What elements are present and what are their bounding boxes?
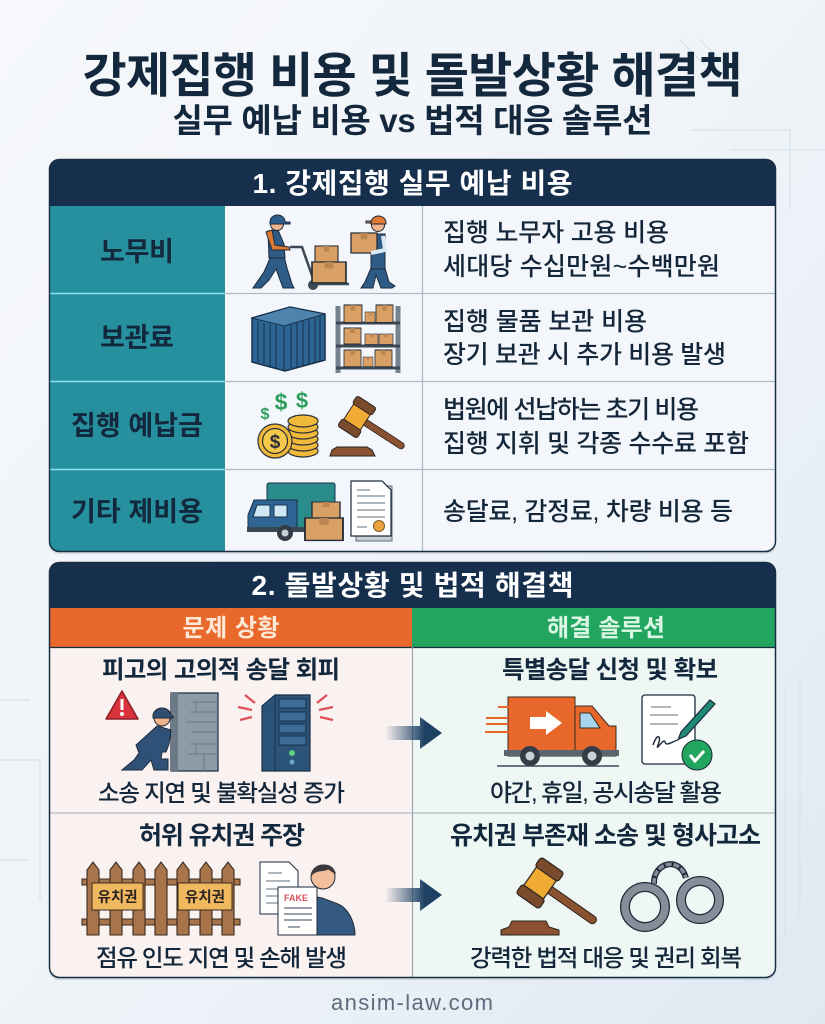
icon: person hiding behind wall: [122, 693, 218, 771]
row: deposit: 집행 예납금: [71, 411, 203, 441]
description: deposit: 법원에 선납하는 초기 비용: [443, 396, 699, 424]
title: 강제집행 비용 및 돌발상황 해결책: [82, 50, 742, 103]
icon: person with fake document: [260, 862, 355, 935]
description: labour: [443, 219, 720, 281]
icon: coins and gavel: [258, 388, 414, 462]
panel heading: 2. 돌발상황 및 법적 해결책: [252, 570, 574, 601]
panel: incidents and solutions: [49, 562, 776, 980]
icon: warning sign: [106, 691, 138, 719]
problem 2: false lien: 점유 인도 지연 및 손해 발생: [96, 945, 347, 971]
row: labour: 노무비: [100, 237, 174, 267]
solution 1: special service: 야간, 휴일, 공시송달 활용: [490, 780, 722, 807]
panel: enforcement costs: [49, 159, 776, 554]
icon: coins and gavel: $: [296, 388, 308, 413]
solution 1: special service: 특별송달 신청 및 확보: [502, 656, 718, 684]
description: storage: 집행 물품 보관 비용: [443, 308, 647, 336]
description: deposit: 집행 지휘 및 각종 수수료 포함: [443, 430, 749, 458]
icon: workers moving boxes: [253, 215, 395, 290]
icon: server with alert rays: [238, 695, 333, 771]
icon: fast orange truck: [485, 697, 619, 766]
arrow: problem 2 to solution 2: [385, 879, 442, 911]
row: storage: 보관료: [100, 323, 174, 353]
row: storage: [100, 305, 726, 373]
subtitle: 실무 예납 비용 vs 법적 대응 솔루션: [172, 102, 652, 139]
solution 2: lawsuit and complaint: [450, 822, 761, 971]
footer website: ansim-law.com: [331, 990, 493, 1015]
row: labour: [100, 215, 720, 290]
description: other costs: 송달료, 감정료, 차량 비용 등: [443, 498, 733, 526]
description: deposit: [443, 396, 749, 458]
icon: gavel: [501, 857, 608, 940]
panel heading: 1. 강제집행 실무 예납 비용: [252, 168, 572, 199]
column header: problem: 문제 상황: [182, 615, 280, 642]
icon: fence with lien signs: 유치권: [97, 889, 138, 906]
problem 1: service evasion: 피고의 고의적 송달 회피: [102, 656, 340, 684]
solution 1: special service: [485, 656, 722, 807]
row: other costs: 기타 제비용: [71, 497, 203, 527]
description: storage: 장기 보관 시 추가 비용 발생: [443, 341, 726, 369]
description: labour: 집행 노무자 고용 비용: [443, 219, 669, 247]
problem 2: false lien: [82, 822, 355, 971]
row: deposit: [71, 388, 749, 462]
icon: coins and gavel: $: [275, 389, 288, 415]
row: other costs: [71, 481, 733, 541]
icon: truck and document: [247, 481, 392, 541]
description: labour: 세대당 수십만원~수백만원: [443, 253, 720, 281]
icon: coins and gavel: $: [270, 432, 281, 453]
problem 1: service evasion: [98, 656, 345, 806]
icon: person with fake document: FAKE: [284, 893, 308, 903]
column header: solution: 해결 솔루션: [547, 615, 665, 642]
icon: handcuffs: [625, 864, 719, 927]
arrow: problem 1 to solution 1: [385, 717, 442, 749]
icon: coins and gavel: $: [261, 406, 270, 423]
icon: fence with lien signs: 유치권: [185, 889, 225, 906]
problem 2: false lien: 허위 유치권 주장: [139, 822, 305, 850]
problem 1: service evasion: 소송 지연 및 불확실성 증가: [98, 780, 345, 806]
icon: container and shelves: [252, 305, 400, 373]
icon: fence with lien signs: [82, 862, 240, 935]
solution 2: lawsuit and complaint: 유치권 부존재 소송 및 형사고소: [450, 822, 761, 850]
solution 2: lawsuit and complaint: 강력한 법적 대응 및 권리 회복: [470, 945, 742, 971]
description: storage: [443, 308, 726, 369]
icon: signed document with pen: [642, 695, 715, 770]
